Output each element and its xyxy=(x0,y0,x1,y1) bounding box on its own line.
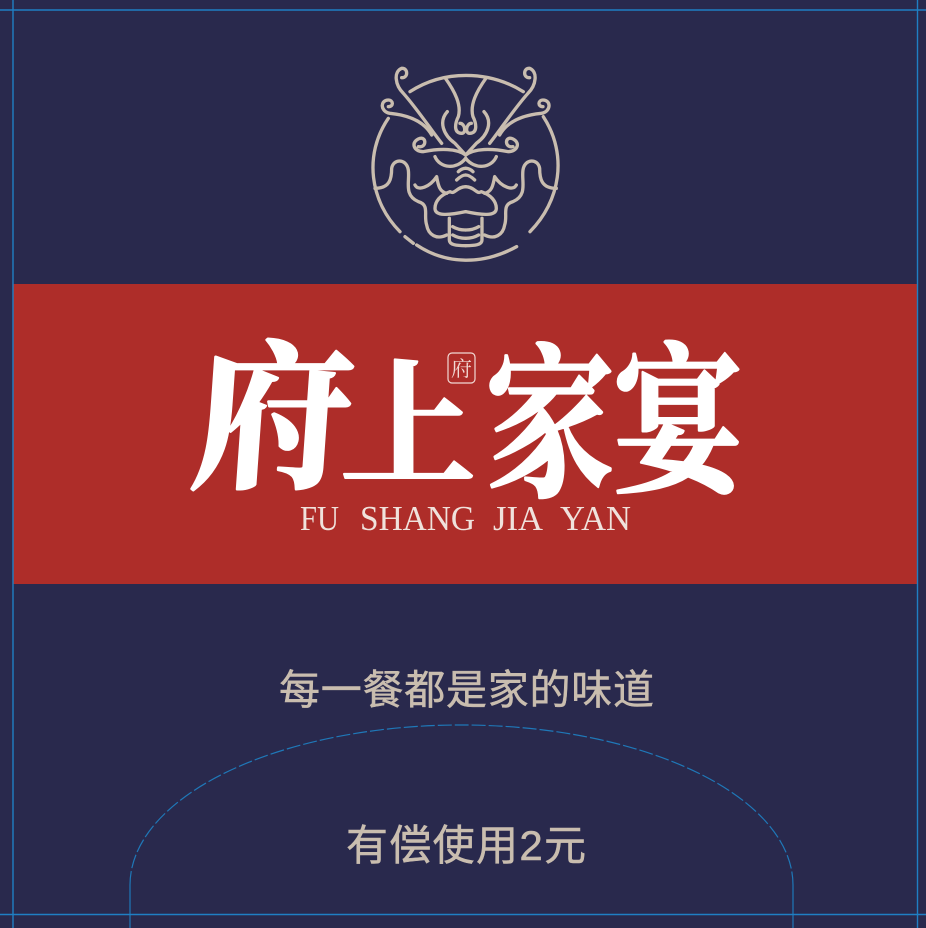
paid-use price label: 有偿使用2元 xyxy=(346,822,586,869)
icon: small seal xyxy=(448,353,475,383)
brand name in Chinese xyxy=(186,332,750,520)
die-cut dashed arch xyxy=(130,725,793,928)
slogan: 每一餐都是家的味道 xyxy=(279,667,654,713)
icon: small seal: 府 xyxy=(451,357,472,381)
icon: dragon head emblem xyxy=(373,68,558,260)
brand name in Chinese: 宴 xyxy=(613,334,750,514)
brand name in pinyin: YAN xyxy=(560,499,631,538)
brand name in Chinese: 府 xyxy=(186,332,360,510)
brand name in pinyin xyxy=(300,499,631,538)
brand name in pinyin: JIA xyxy=(493,499,544,538)
brand name in Chinese: 家 xyxy=(485,336,615,520)
brand name in pinyin: SHANG xyxy=(360,499,475,538)
brand name in pinyin: FU xyxy=(300,499,339,538)
brand name in Chinese: 上 xyxy=(340,353,476,503)
panel: red brand band xyxy=(13,284,917,584)
